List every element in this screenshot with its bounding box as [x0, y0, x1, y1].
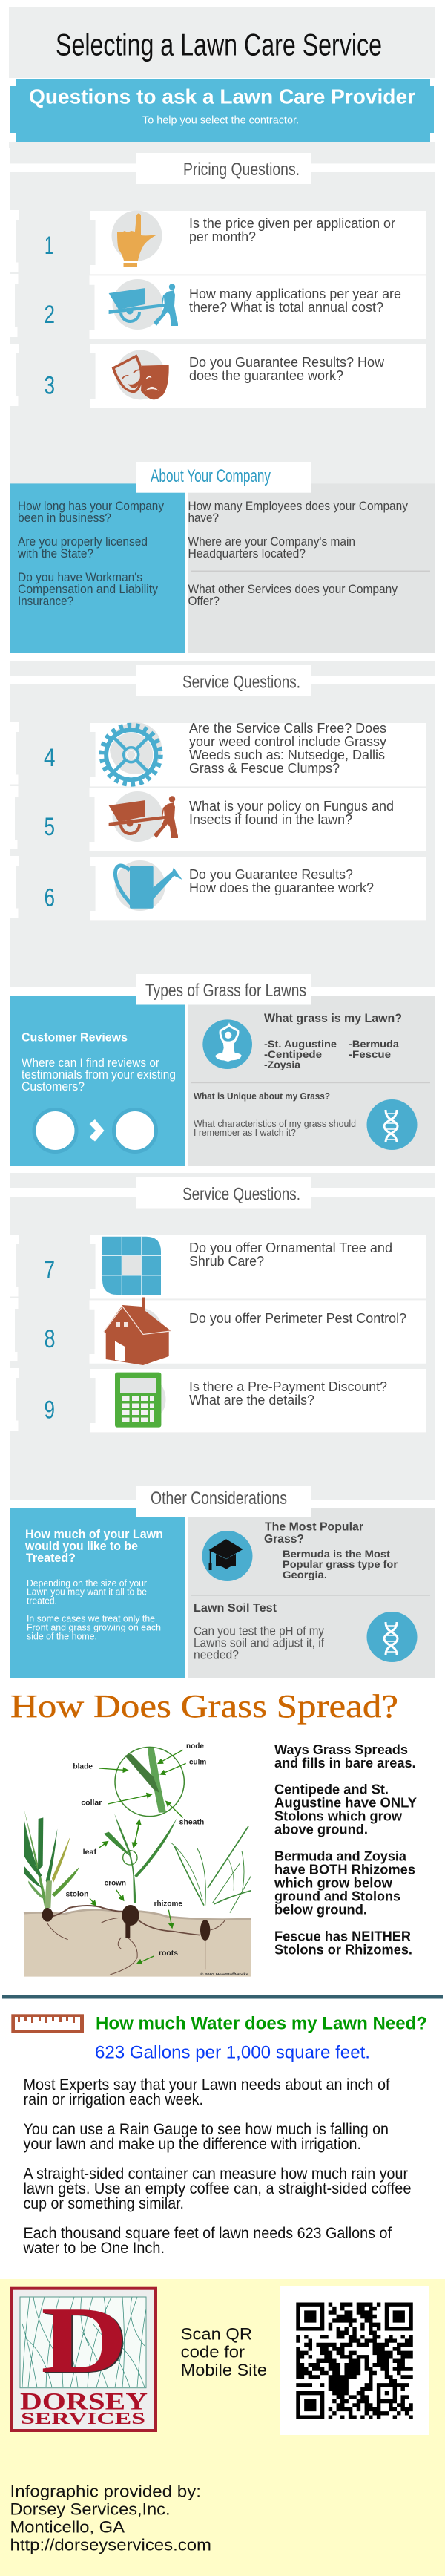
- text: water advice: Most Experts say that your Lawn needs about an inch of: [24, 2076, 390, 2093]
- panel: what grass is my lawn: [188, 996, 435, 1166]
- heading: about your company: About Your Company: [151, 466, 271, 486]
- heading: water need: How much Water does my Lawn Need?: [96, 2013, 427, 2033]
- heading: pricing questions: Pricing Questions.: [183, 160, 300, 180]
- text: ways grass spreads: ground and Stolons: [274, 1889, 400, 1903]
- text: infographic credit: Monticello, GA: [10, 2517, 125, 2536]
- magnified circle: [115, 1747, 184, 1865]
- text: infographic credit: http://dorseyservices.com: [10, 2535, 211, 2554]
- icon: theatre masks: [112, 350, 169, 399]
- row 2: [10, 274, 426, 339]
- panel: about your company grey: How many Employees does your Company: [188, 500, 409, 513]
- panel: popular grass and soil test: Can you test the pH of my: [194, 1624, 325, 1638]
- row 3: [10, 344, 426, 408]
- title panel: [9, 7, 435, 78]
- part labels: sheath: [179, 1818, 204, 1826]
- stolon and rhizome: [47, 1906, 225, 1975]
- panel: popular grass and soil test: Lawn Soil Test: [194, 1602, 277, 1615]
- part labels: © 2002 HowStuffWorks: [200, 1972, 248, 1977]
- icon: pointing hand: [111, 211, 162, 267]
- row 1: [10, 210, 426, 274]
- panel: what grass is my lawn: I remember as I watch it?: [194, 1127, 296, 1138]
- text: ways grass spreads: Augustine have ONLY: [274, 1796, 417, 1811]
- panel: about your company blue: been in business?: [18, 511, 111, 525]
- grass list: -Centipede: [264, 1048, 322, 1060]
- grass list: -St. Augustine: [264, 1038, 337, 1050]
- text: infographic credit: [10, 2482, 211, 2554]
- question text 4: Are the Service Calls Free? Does: [189, 721, 386, 736]
- question text 1: Is the price given per application or: [189, 216, 395, 231]
- question text 4: your weed control include Grassy: [189, 734, 386, 749]
- row 5: [10, 786, 426, 851]
- text: scan qr: code for: [181, 2343, 245, 2361]
- number 1: 1: [44, 232, 53, 260]
- question text 7: [189, 1240, 392, 1269]
- question text 2: there? What is total annual cost?: [189, 300, 383, 315]
- panel: how much lawn treated: Treated?: [26, 1551, 76, 1565]
- panel: customer reviews: Customer Reviews: [22, 1031, 128, 1044]
- icon: graduation cap: [202, 1531, 252, 1581]
- banner: questions to ask: Questions to ask a Lawn Care Provider: [29, 85, 415, 108]
- footer panel: [0, 2279, 445, 2576]
- panel: how much lawn treated: In some cases we treat only the: [27, 1612, 155, 1624]
- panel: how much lawn treated: How much of your Lawn: [25, 1527, 163, 1541]
- number 7: 7: [44, 1256, 55, 1284]
- text: water advice: water to be One Inch.: [23, 2240, 165, 2257]
- heading: other considerations: [136, 1486, 311, 1517]
- question text 4: Grass & Fescue Clumps?: [189, 761, 340, 776]
- icon: circles and chevron: [34, 1109, 156, 1152]
- panel: service questions background: [10, 661, 435, 987]
- part labels: node: [186, 1742, 204, 1750]
- icon: ruler: [11, 2014, 84, 2033]
- arrows: [90, 1750, 186, 1964]
- question text 5: What is your policy on Fungus and: [189, 799, 394, 814]
- diagram: grass anatomy: [24, 1742, 251, 1977]
- question text 5: Insects if found in the lawn?: [189, 812, 352, 827]
- panel: about your company blue: Are you properly licensed: [18, 535, 148, 549]
- part labels: blade: [73, 1762, 93, 1771]
- question text 7: Shrub Care?: [189, 1254, 264, 1269]
- panel: how much lawn treated: [10, 1508, 185, 1678]
- text: ways grass spreads: Stolons or Rhizomes.: [274, 1943, 412, 1958]
- panel: about your company blue: Compensation and Liability: [18, 583, 159, 596]
- logo: dorsey services: SERVICES: [21, 2409, 145, 2428]
- part labels: rhizome: [154, 1900, 182, 1909]
- panel: about your company grey: What other Services does your Company: [188, 583, 398, 596]
- text: water advice: [23, 2076, 412, 2257]
- icon: wheelbarrow blue: [109, 279, 178, 330]
- panel: customer reviews: testimonials from your existing: [22, 1068, 176, 1082]
- panel: popular grass and soil test: needed?: [194, 1648, 239, 1661]
- number 4: 4: [44, 744, 55, 772]
- text: water advice: rain or irrigation each week.: [24, 2091, 203, 2108]
- panel: customer reviews: [10, 996, 185, 1166]
- question text 3: [189, 355, 385, 383]
- banner: questions to ask: To help you select the contractor.: [142, 114, 299, 126]
- panel: service questions 2 background: [10, 1173, 435, 1500]
- row 4: [10, 721, 426, 786]
- panel: about your company blue: Insurance?: [18, 595, 73, 608]
- grass list: -Fescue: [349, 1048, 391, 1060]
- text: water advice: A straight-sided container can measure how much rain your: [24, 2165, 408, 2183]
- part labels: collar: [81, 1799, 102, 1808]
- question text 3: Do you Guarantee Results? How: [189, 355, 385, 370]
- heading: other considerations: Other Considerations: [151, 1488, 287, 1508]
- icon: calculator: [115, 1373, 166, 1428]
- panel: how much lawn treated: would you like to be: [24, 1539, 138, 1553]
- panel: what grass is my lawn: What characteristics of my grass should: [194, 1118, 356, 1129]
- panel: how much lawn treated: side of the home.: [27, 1631, 97, 1642]
- icon: gear: [102, 722, 162, 784]
- number 2: 2: [44, 301, 55, 329]
- question text 5: [189, 799, 394, 827]
- text: scan qr: Mobile Site: [181, 2361, 267, 2379]
- panel: about your company grey: have?: [188, 511, 219, 525]
- banner: questions to ask: [10, 79, 434, 142]
- panel: popular grass and soil test: Lawns soil and adjust it, if: [194, 1636, 324, 1650]
- panel: pricing questions background: [9, 142, 435, 484]
- panel: about your company blue: with the State?: [17, 547, 93, 560]
- question text 9: What are the details?: [189, 1393, 314, 1408]
- logo: dorsey services: [10, 2287, 157, 2432]
- panel: how much lawn treated: Depending on the size of your: [27, 1578, 148, 1589]
- text: water advice: Each thousand square feet of lawn needs 623 Gallons of: [24, 2225, 392, 2242]
- text: ways grass spreads: Bermuda and Zoysia: [274, 1848, 407, 1863]
- panel: popular grass and soil test: [188, 1508, 435, 1678]
- number 5: 5: [44, 813, 55, 841]
- question text 6: How does the guarantee work?: [189, 880, 374, 895]
- part labels: crown: [105, 1879, 126, 1887]
- text: ways grass spreads: [274, 1742, 417, 1958]
- panel: popular grass and soil test: Georgia.: [283, 1569, 327, 1580]
- row 7: [10, 1235, 426, 1298]
- question text 3: does the guarantee work?: [189, 368, 343, 383]
- panel: customer reviews: Where can I find reviews or: [22, 1056, 159, 1070]
- panel: customer reviews: Customers?: [22, 1080, 85, 1094]
- icon: dna: [366, 1612, 417, 1662]
- centre plant: [104, 1814, 177, 1903]
- panel: popular grass and soil test: Bermuda is the Most: [283, 1548, 390, 1560]
- icon: yoga figure: [202, 1019, 252, 1069]
- logo: dorsey services: DORSEY: [20, 2389, 148, 2416]
- text: scan qr: Scan QR: [181, 2325, 252, 2344]
- icon: tile grid: [102, 1237, 161, 1295]
- soil: [24, 1909, 251, 1977]
- panel: how much lawn treated: Lawn you may want it all to be: [27, 1586, 147, 1598]
- question text 8: Do you offer Perimeter Pest Control?: [189, 1311, 406, 1326]
- panel: popular grass and soil test: The Most Popular: [265, 1521, 363, 1534]
- text: ways grass spreads: Centipede and St.: [274, 1782, 389, 1797]
- heading: pricing questions: [136, 153, 311, 184]
- row 9: [10, 1368, 426, 1432]
- text: ways grass spreads: above ground.: [274, 1823, 368, 1837]
- text: water advice: cup or something similar.: [24, 2195, 184, 2212]
- number 6: 6: [44, 883, 55, 912]
- question text 4: [189, 721, 386, 776]
- text: infographic credit: Dorsey Services,Inc.: [10, 2500, 171, 2518]
- question text 4: Weeds such as: Nutsedge, Dallis: [189, 748, 385, 762]
- icon: house: [104, 1298, 171, 1365]
- grass list: -Zoysia: [264, 1059, 300, 1070]
- heading: types of grass: Types of Grass for Lawns: [145, 981, 306, 1001]
- question text 1: per month?: [189, 229, 256, 244]
- text: water advice: lawn gets. Use an empty coffee can, a straight-sided coffee: [24, 2180, 411, 2197]
- panel: about your company blue: [10, 483, 185, 653]
- question text 9: Is there a Pre-Payment Discount?: [189, 1379, 387, 1394]
- text: ways grass spreads: Stolons which grow: [274, 1809, 403, 1824]
- panel: about your company grey: [188, 483, 435, 653]
- icon: watering can: [115, 860, 182, 911]
- number 8: 8: [44, 1325, 55, 1353]
- part labels: roots: [159, 1949, 178, 1958]
- panel: about your company grey: Where are your Company's main: [188, 535, 355, 549]
- part labels: culm: [189, 1759, 206, 1767]
- number 9: 9: [44, 1396, 55, 1424]
- callout: gallons: 623 Gallons per 1,000 square feet.: [95, 2043, 370, 2063]
- part labels: stolon: [66, 1891, 88, 1899]
- text: ways grass spreads: have BOTH Rhizomes: [274, 1862, 415, 1877]
- text: water advice: You can use a Rain Gauge to see how much is falling on: [24, 2121, 389, 2138]
- text: scan qr: [181, 2325, 267, 2379]
- question text 2: [189, 287, 401, 315]
- panel: what grass is my lawn: What is Unique about my Grass?: [194, 1091, 330, 1102]
- heading: types of grass: [136, 974, 311, 1005]
- row 8: [10, 1298, 426, 1365]
- text: ways grass spreads: which grow below: [274, 1875, 393, 1890]
- icon: dna: [366, 1099, 417, 1150]
- panel: popular grass and soil test: Popular grass type for: [283, 1558, 398, 1570]
- number 3: 3: [44, 371, 55, 399]
- panel: what grass is my lawn: What grass is my Lawn?: [264, 1011, 402, 1025]
- text: ways grass spreads: and fills in bare areas.: [274, 1756, 416, 1771]
- panel: popular grass and soil test: Grass?: [264, 1533, 304, 1546]
- heading: about your company: [136, 462, 311, 493]
- question text 2: How many applications per year are: [189, 287, 401, 301]
- logo: dorsey services: D: [41, 2287, 128, 2393]
- panel: about your company grey: Offer?: [188, 595, 220, 608]
- panel: how much lawn treated: Front and grass growing on each: [27, 1622, 161, 1633]
- text: ways grass spreads: below ground.: [274, 1902, 367, 1917]
- left grass tuft: [24, 1809, 79, 1909]
- text: ways grass spreads: Ways Grass Spreads: [274, 1742, 408, 1757]
- heading: service questions 2: Service Questions.: [182, 1185, 300, 1204]
- heading: how does grass spread: How Does Grass Spread?: [10, 1688, 398, 1725]
- panel: about your company blue: How long has your Company: [18, 500, 165, 513]
- grass lines: [22, 2297, 146, 2387]
- question text 1: [189, 216, 395, 244]
- question text 9: [189, 1379, 387, 1408]
- text: infographic credit: Infographic provided by:: [10, 2482, 201, 2500]
- question text 7: Do you offer Ornamental Tree and: [189, 1240, 392, 1255]
- heading: service questions: [136, 665, 311, 696]
- question text 6: [189, 867, 374, 895]
- text: ways grass spreads: Fescue has NEITHER: [274, 1929, 411, 1944]
- qr code: [280, 2286, 429, 2435]
- grass list: [264, 1038, 399, 1070]
- panel: about your company grey: Headquarters located?: [188, 547, 306, 560]
- right grass tuft: [171, 1826, 251, 1913]
- panel: about your company blue: Do you have Workman's: [18, 571, 142, 584]
- heading: service questions: Service Questions.: [182, 673, 300, 692]
- grass list: -Bermuda: [349, 1038, 399, 1050]
- text: water advice: your lawn and make up the difference with irrigation.: [24, 2136, 361, 2153]
- panel: how much lawn treated: treated.: [27, 1595, 57, 1606]
- question text 6: Do you Guarantee Results?: [189, 867, 353, 882]
- part labels: leaf: [83, 1848, 97, 1857]
- heading: service questions 2: [136, 1177, 311, 1209]
- part labels: [66, 1742, 248, 1977]
- icon: wheelbarrow red: [109, 791, 178, 842]
- row 6: [10, 856, 426, 920]
